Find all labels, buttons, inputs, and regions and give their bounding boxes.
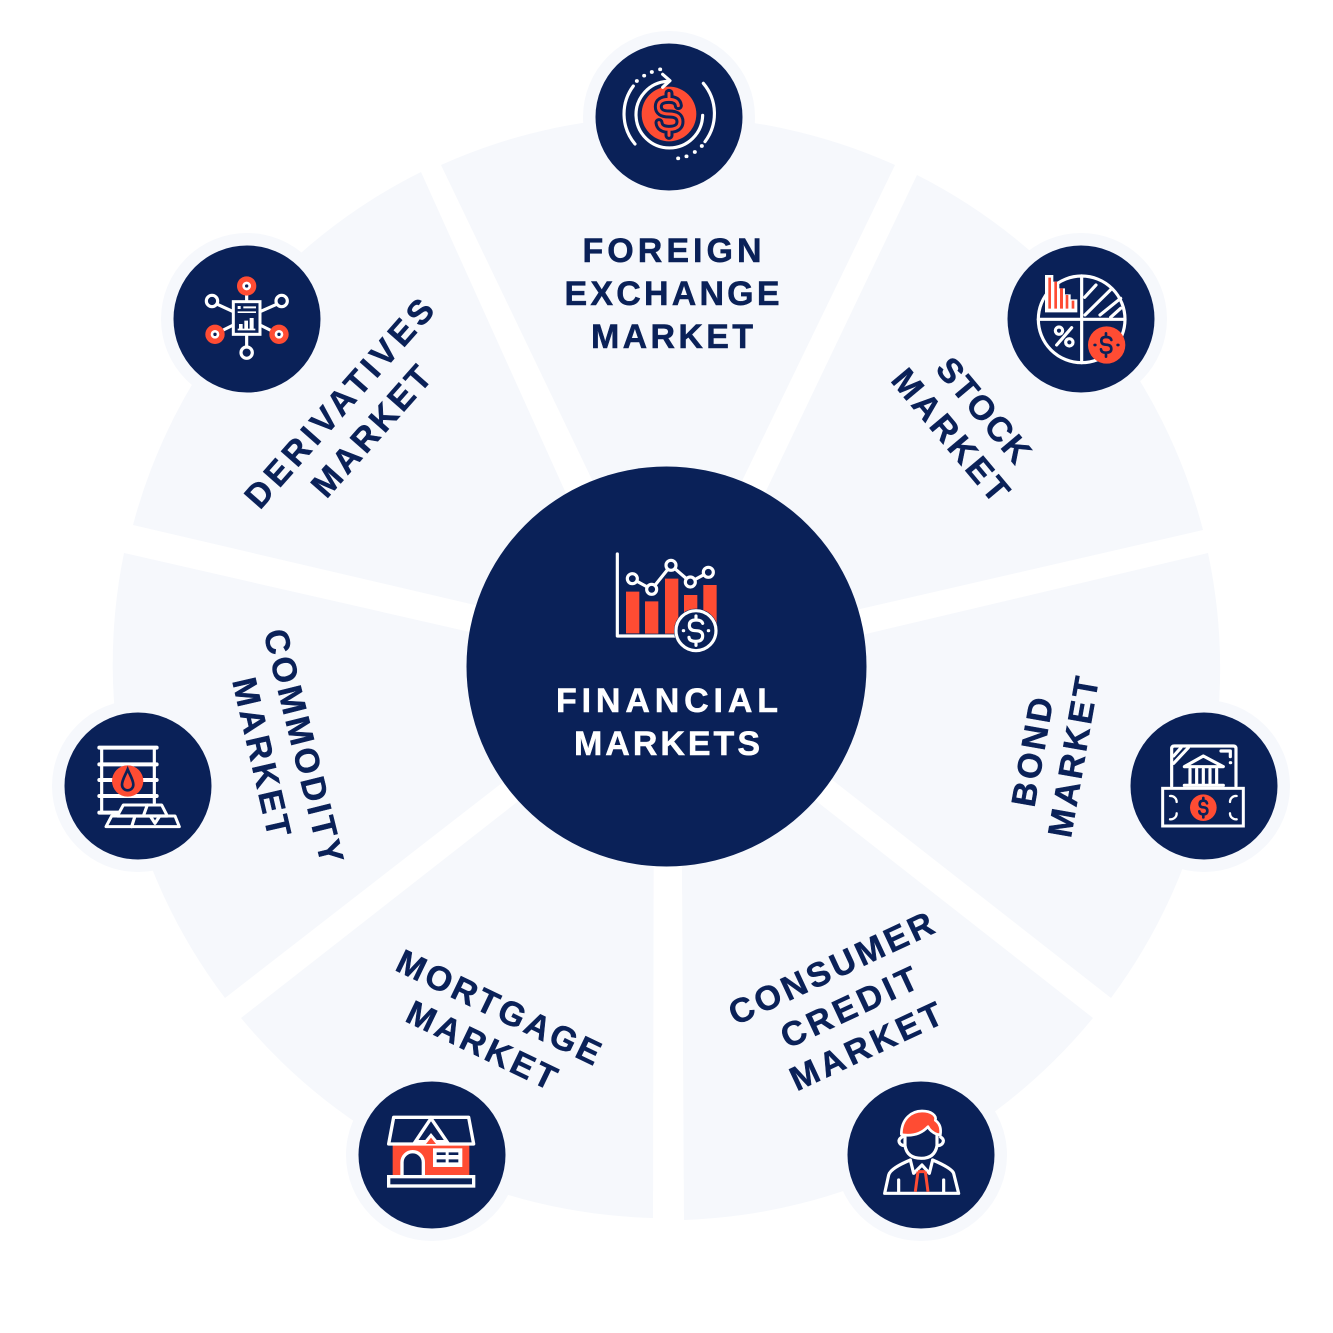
panel: foreign exchange sector bbox=[441, 116, 895, 636]
panel: commodity sector bbox=[113, 553, 645, 998]
label: bond market: MARKET bbox=[1041, 674, 1107, 840]
label: stock market: STOCK bbox=[928, 350, 1039, 471]
icon: person badge bbox=[835, 1069, 1007, 1241]
label: bond market bbox=[1005, 674, 1107, 840]
label: consumer credit market: CONSUMER bbox=[723, 905, 940, 1033]
panel: mortgage sector bbox=[241, 695, 654, 1218]
label: commodity market: COMMODITY bbox=[256, 625, 351, 868]
label: derivatives market: MARKET bbox=[304, 358, 440, 505]
icon: currency exchange badge bbox=[583, 31, 755, 203]
icon: financial chart bbox=[617, 554, 718, 653]
label: consumer credit market: MARKET bbox=[784, 995, 949, 1099]
label: consumer credit market: CREDIT bbox=[775, 960, 924, 1056]
icon: stock pie chart badge bbox=[995, 233, 1167, 405]
icon: derivatives network badge bbox=[161, 233, 333, 405]
panel: stock sector bbox=[691, 175, 1203, 648]
label: bond market: BOND bbox=[1005, 695, 1061, 810]
label: foreign exchange market: EXCHANGE bbox=[564, 275, 780, 313]
label: foreign exchange market bbox=[564, 232, 780, 356]
icon: oil barrel and gold badge bbox=[52, 700, 224, 872]
label: foreign exchange market: FOREIGN bbox=[582, 232, 762, 270]
central hub bbox=[466, 466, 866, 866]
title: financial markets: FINANCIAL bbox=[556, 682, 778, 720]
title: financial markets bbox=[556, 682, 778, 763]
icon: house badge bbox=[346, 1069, 518, 1241]
panel: derivatives sector bbox=[133, 172, 633, 642]
label: stock market: MARKET bbox=[884, 361, 1017, 510]
label: derivatives market: DERIVATIVES bbox=[237, 291, 442, 516]
label: mortgage market: MORTGAGE bbox=[390, 943, 607, 1073]
label: mortgage market: MARKET bbox=[400, 994, 563, 1098]
panel: consumer credit sector bbox=[681, 695, 1093, 1220]
icon: bank and banknote badge bbox=[1118, 700, 1290, 872]
label: consumer credit market bbox=[723, 905, 949, 1099]
label: foreign exchange market: MARKET bbox=[591, 318, 753, 356]
label: commodity market: MARKET bbox=[224, 674, 298, 841]
title: financial markets: MARKETS bbox=[574, 725, 760, 763]
panel: bond sector bbox=[697, 553, 1220, 998]
